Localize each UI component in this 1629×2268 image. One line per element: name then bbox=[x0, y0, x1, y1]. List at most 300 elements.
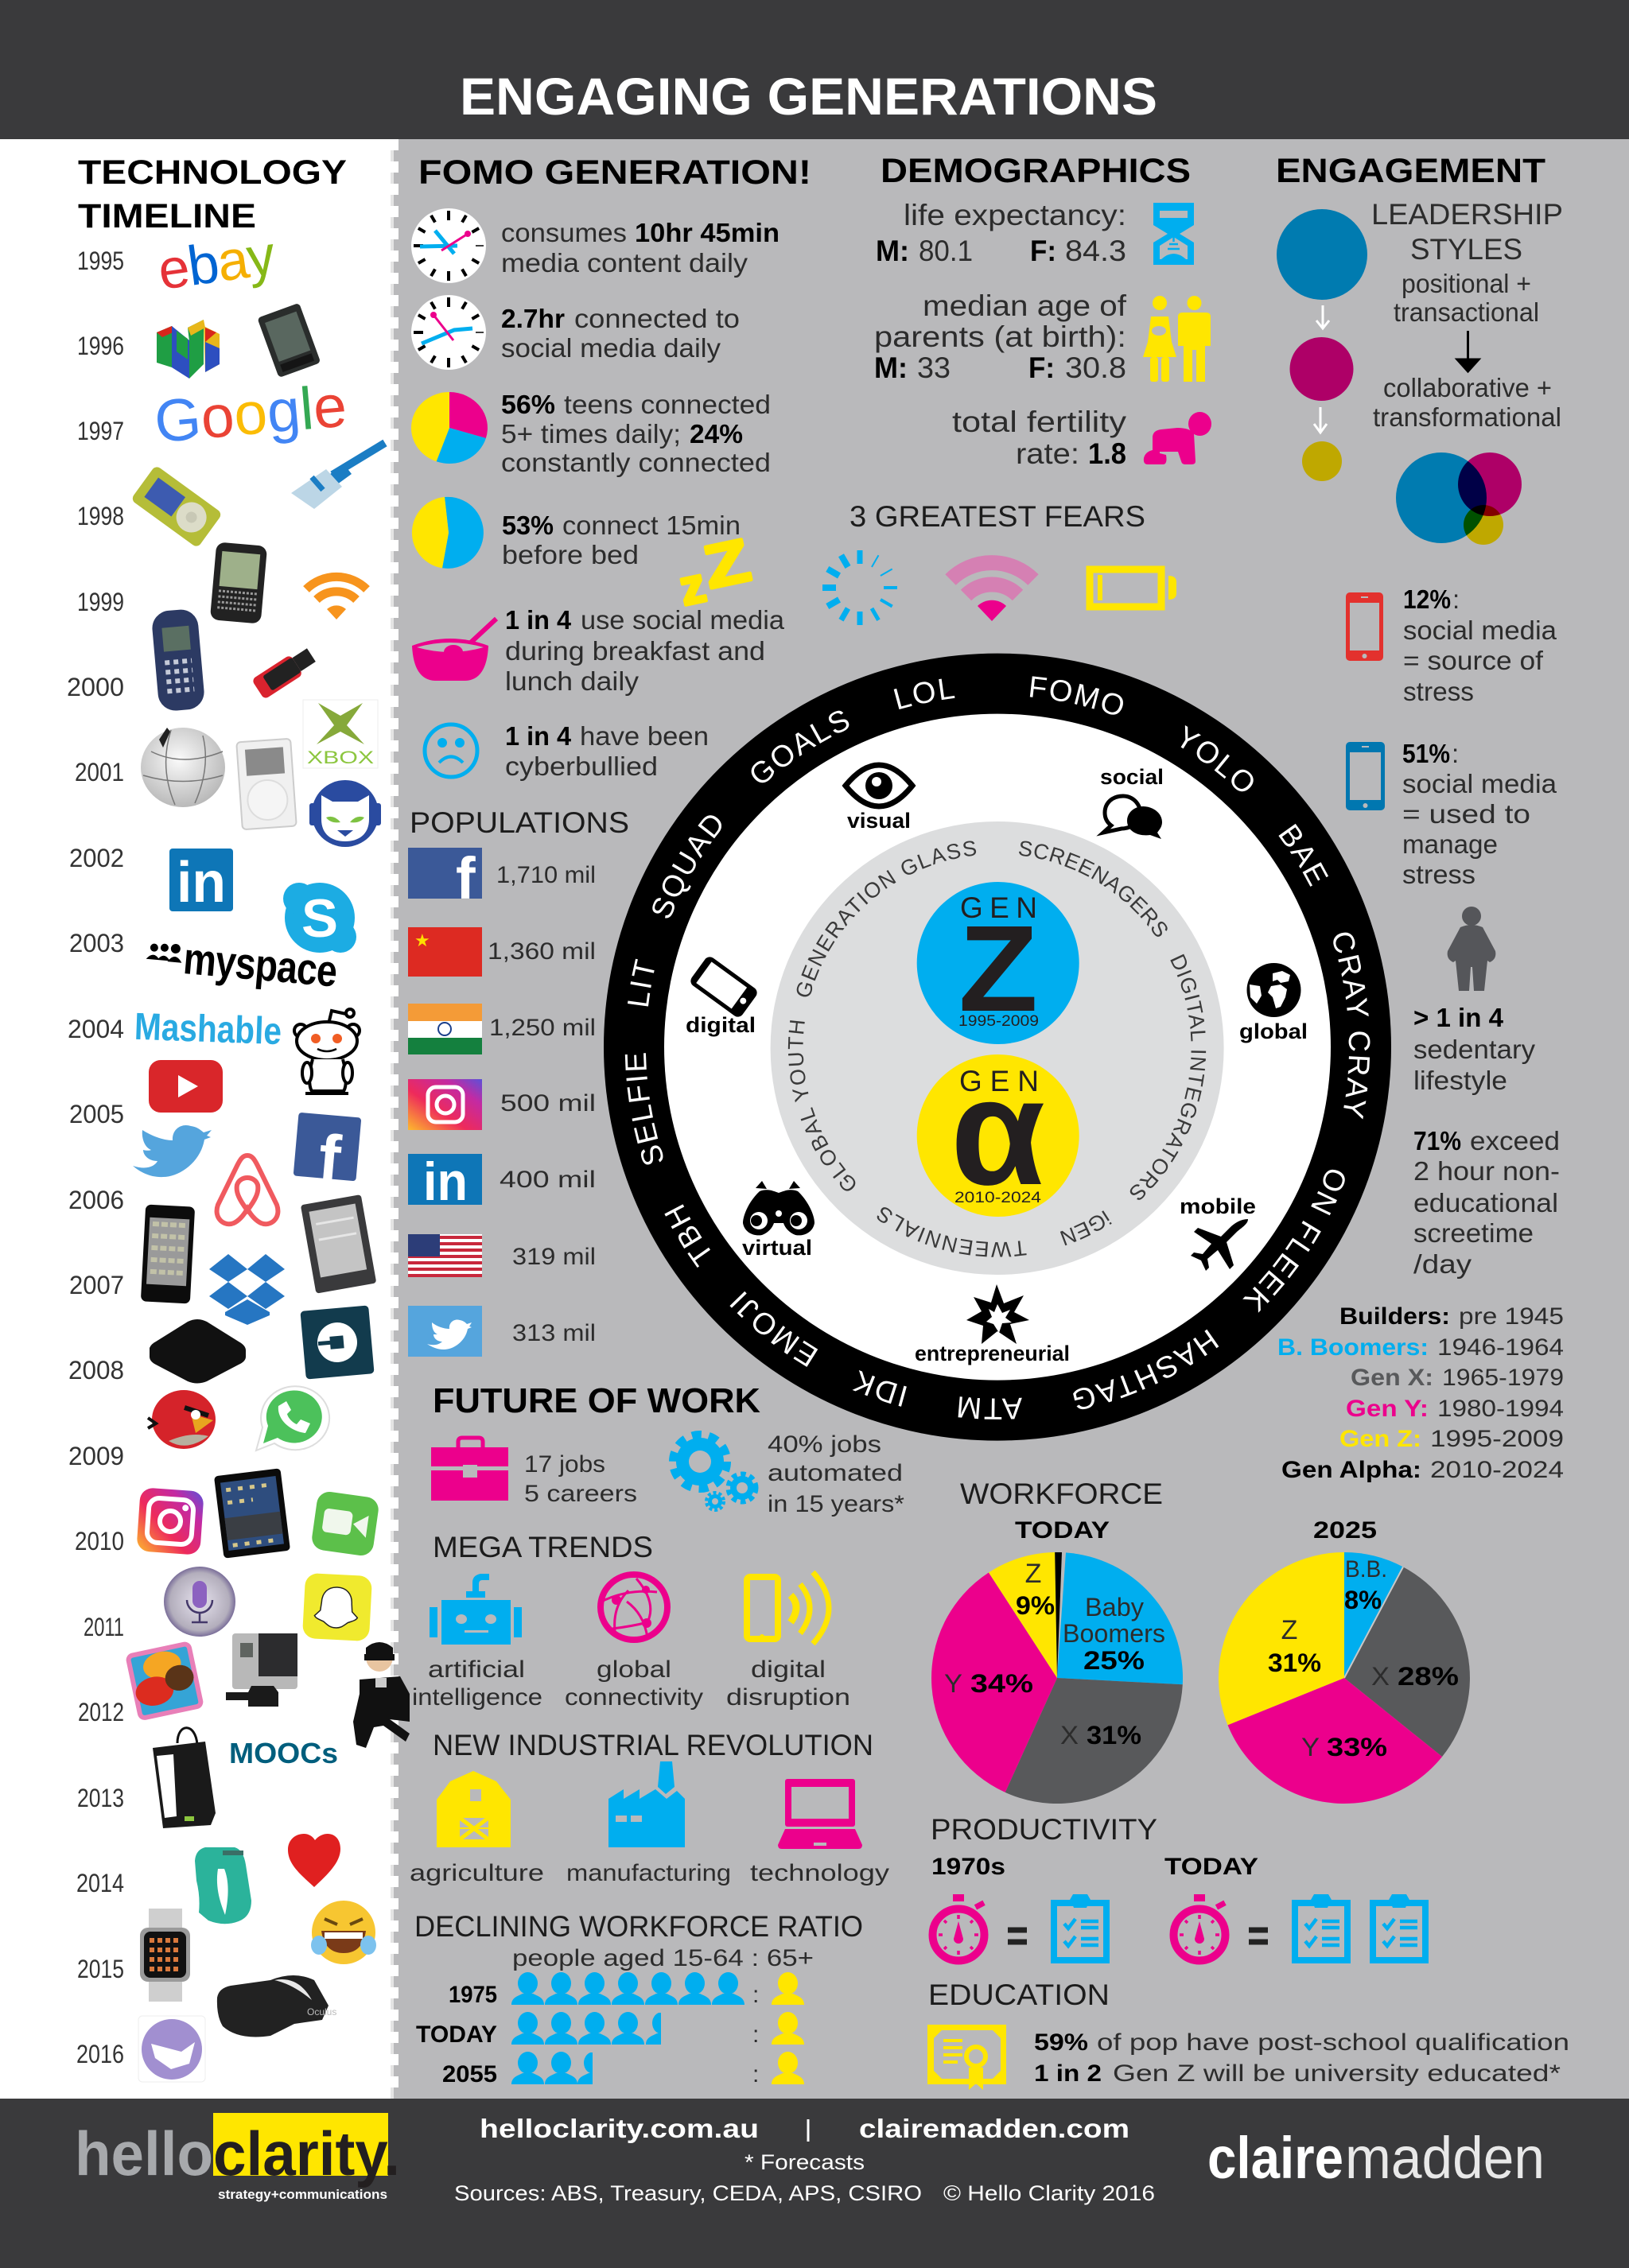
stat: life expectancy: F: bbox=[1030, 235, 1056, 267]
stat: breakfast: 1 in 4 bbox=[505, 605, 572, 635]
badge: gen alpha: 2010-2024 bbox=[954, 1190, 1042, 1206]
stat: life expectancy bbox=[876, 199, 1126, 267]
icon: low battery bbox=[1090, 569, 1176, 607]
stat: median age of parents: parents (at birth): bbox=[874, 320, 1126, 353]
label: manufacturing: manufacturing bbox=[566, 1860, 731, 1886]
chart: workforce today pie: 9% bbox=[1016, 1591, 1055, 1620]
stat: source of stress: 12% bbox=[1403, 584, 1451, 614]
label: global connectivity bbox=[565, 1656, 703, 1711]
text: website links: helloclarity.com.au bbox=[480, 2114, 759, 2143]
stat: before bed: before bed bbox=[502, 540, 639, 569]
icon: wikipedia globe bbox=[141, 728, 225, 807]
heading: new industrial revolution: NEW INDUSTRIAL REVOLUTION bbox=[433, 1729, 873, 1761]
logo: facetime bbox=[310, 1490, 380, 1557]
label: global connectivity: connectivity bbox=[565, 1684, 703, 1711]
year labels: 2008 bbox=[68, 1356, 124, 1384]
stat: education bbox=[1034, 2029, 1569, 2087]
stat: teens connected: 56% bbox=[501, 390, 555, 419]
year labels: 2009 bbox=[68, 1442, 124, 1470]
logo: google: Google bbox=[152, 371, 349, 455]
stat: fertility: total fertility bbox=[952, 406, 1127, 438]
stat: teens connected: teens connected bbox=[564, 390, 771, 419]
label: people aged: people aged 15-64 : 65+ bbox=[512, 1945, 814, 1971]
stat: screentime: exceed bbox=[1470, 1126, 1560, 1155]
logo: hello clarity: strategy+communications bbox=[218, 2187, 387, 2202]
badge: gen z: Z bbox=[958, 900, 1038, 1037]
stat: teens connected: constantly connected bbox=[501, 448, 771, 477]
stat: manage stress: manage bbox=[1402, 829, 1498, 859]
icon: laptop bbox=[778, 1779, 862, 1849]
text: leadership styles: collaborative + bbox=[1383, 373, 1552, 402]
year labels bbox=[67, 247, 124, 2068]
logo: instagram bbox=[136, 1487, 204, 1555]
chart: workforce today pie: X bbox=[1060, 1721, 1079, 1750]
chart: workforce today pie: Baby bbox=[1085, 1593, 1144, 1621]
ring of slang words: LIT bbox=[628, 959, 655, 1007]
heading: technology timeline: TECHNOLOGY bbox=[78, 153, 347, 192]
year labels: 1998 bbox=[77, 502, 124, 530]
label: global connectivity: global bbox=[597, 1656, 671, 1683]
flag: china: ★ bbox=[414, 930, 430, 950]
stat: screentime: screetime bbox=[1413, 1218, 1534, 1248]
stat: jobs automated: 40% jobs bbox=[768, 1431, 881, 1458]
icon: gangnam style figure bbox=[353, 1642, 410, 1748]
stat: manage stress: 51% bbox=[1402, 739, 1450, 768]
year labels: 2010 bbox=[75, 1527, 124, 1555]
inner ring of generation names: GENERATION GLASS bbox=[797, 841, 977, 997]
flag: usa bbox=[408, 1234, 482, 1277]
label: digital: digital bbox=[686, 1013, 756, 1037]
stat: manage stress: = used to bbox=[1402, 799, 1530, 829]
flag: instagram bbox=[408, 1079, 482, 1130]
icon: oculus headset: Oculus bbox=[307, 2006, 336, 2018]
icon: 3d printer bbox=[153, 1728, 216, 1828]
chart: workforce today pie: Y bbox=[944, 1669, 962, 1698]
icon: robot bbox=[430, 1574, 522, 1645]
label: mobile: mobile bbox=[1180, 1194, 1256, 1218]
icon: nintendo 64 bbox=[157, 320, 220, 379]
logo: claire madden: claire bbox=[1207, 2125, 1343, 2191]
label: digital disruption: disruption bbox=[726, 1684, 850, 1711]
icon: weak wifi bbox=[951, 563, 1033, 621]
text: leadership styles: transactional bbox=[1394, 297, 1539, 327]
chart: workforce today pie bbox=[931, 1552, 1183, 1804]
legend: generations: Gen Z: bbox=[1339, 1426, 1421, 1452]
stat: social media daily: connected to bbox=[574, 304, 740, 333]
logo: twitter bird bbox=[133, 1125, 212, 1177]
stat: fertility: rate: bbox=[1016, 437, 1079, 470]
icon: napster bbox=[309, 780, 381, 847]
badge: gen alpha bbox=[917, 1046, 1079, 1217]
flag: linkedin bbox=[408, 1151, 482, 1212]
stat: education: Gen Z will be university educated* bbox=[1113, 2060, 1561, 2087]
text: website links: clairemadden.com bbox=[859, 2114, 1129, 2143]
logo: linkedin: in bbox=[177, 851, 226, 915]
heading: mega trends: MEGA TRENDS bbox=[433, 1531, 653, 1563]
stat: source of stress: : bbox=[1452, 584, 1460, 614]
chart: workforce 2025 pie bbox=[1219, 1552, 1470, 1804]
chart: teens connected pie bbox=[411, 392, 488, 464]
logo: facebook: f bbox=[316, 1121, 344, 1195]
inner ring of generation names: GLOBAL YOUTH bbox=[787, 1020, 856, 1191]
stat: breakfast: use social media bbox=[581, 605, 785, 635]
icon: visual eye bbox=[846, 765, 912, 806]
chart: workforce 2025 pie: B.B. bbox=[1345, 1556, 1387, 1583]
label: virtual: virtual bbox=[742, 1236, 812, 1260]
label: social: social bbox=[1100, 765, 1164, 789]
year labels: 1997 bbox=[77, 417, 124, 445]
label: artificial intelligence: artificial bbox=[428, 1656, 525, 1683]
ring of slang words: CRAY CRAY bbox=[1333, 932, 1370, 1120]
label: agriculture: agriculture bbox=[410, 1860, 544, 1886]
chart: 2055 ratio bbox=[442, 2052, 804, 2087]
icon: certificate bbox=[927, 2025, 1006, 2090]
text: leadership styles: LEADERSHIP bbox=[1371, 198, 1563, 231]
label: india population: 1,250 mil bbox=[489, 1015, 596, 1041]
text: leadership styles: transformational bbox=[1373, 402, 1561, 432]
icon: loading spinner bbox=[822, 550, 897, 625]
inner ring of generation names: TWEENNIALS bbox=[877, 1207, 1027, 1257]
stat: manage stress bbox=[1402, 739, 1557, 889]
chart: 1975 ratio: 1975 bbox=[449, 1982, 497, 2008]
logo: moocs: MOOCs bbox=[229, 1737, 338, 1769]
heading: fomo generation: FOMO GENERATION! bbox=[418, 153, 811, 192]
stat: social media daily: 2.7hr bbox=[501, 304, 565, 333]
header band bbox=[0, 0, 1629, 139]
legend: generations: Gen Alpha: bbox=[1281, 1457, 1421, 1483]
logo: reddit alien bbox=[294, 1009, 360, 1093]
icon: parents bbox=[1143, 296, 1211, 382]
icon: kindle bbox=[301, 1194, 376, 1294]
icon: oculus headset bbox=[217, 1975, 336, 2037]
chart: workforce 2025 pie: Z bbox=[1281, 1615, 1297, 1645]
year labels: 2005 bbox=[69, 1100, 124, 1128]
logo: hello clarity: clarity. bbox=[213, 2118, 400, 2188]
diagram: overlapping circles bbox=[1396, 452, 1522, 545]
panel: technology timeline background bbox=[0, 139, 394, 2099]
icon: sad face bbox=[425, 724, 477, 777]
year labels: 2003 bbox=[69, 929, 124, 957]
stat: median age of parents: M: bbox=[874, 351, 908, 384]
flag: facebook: f bbox=[456, 845, 476, 911]
legend: generations: 1946-1964 bbox=[1437, 1334, 1564, 1361]
year labels: 2001 bbox=[75, 758, 124, 786]
year labels: 2006 bbox=[68, 1186, 124, 1214]
stat: sedentary: lifestyle bbox=[1413, 1066, 1507, 1095]
icon: laughing emoji bbox=[311, 1901, 376, 1964]
inner ring of generation names bbox=[787, 841, 1206, 1257]
arrow: leadership shift bbox=[1457, 331, 1479, 371]
stat: 17 jobs: 5 careers bbox=[524, 1481, 637, 1507]
stat: media content bbox=[501, 218, 780, 278]
stat: manage stress: : bbox=[1452, 739, 1459, 768]
text: website links bbox=[480, 2114, 1129, 2143]
chart: 1975 ratio: : bbox=[752, 1982, 759, 2008]
icon: factory bbox=[608, 1761, 685, 1847]
stat: media content: 10hr 45min bbox=[635, 218, 780, 247]
legend: generations bbox=[1277, 1303, 1564, 1483]
ring of slang words: ON FLEEK bbox=[1242, 1169, 1345, 1313]
logo: snapchat bbox=[302, 1573, 372, 1641]
label: today productivity: TODAY bbox=[1164, 1854, 1258, 1880]
stat: median age of parents: median age of bbox=[923, 289, 1127, 322]
year labels: 2014 bbox=[76, 1869, 124, 1897]
icon: wifi orange bbox=[306, 577, 367, 619]
legend: generations: B. Boomers: bbox=[1277, 1334, 1429, 1361]
label: visual: visual bbox=[847, 809, 911, 833]
icon: binoculars bbox=[743, 1181, 814, 1235]
icon: clock media bbox=[411, 208, 486, 283]
logo: whatsapp bbox=[256, 1386, 329, 1451]
ring of slang words: BAE bbox=[1279, 824, 1328, 887]
icon: ipad bbox=[214, 1468, 290, 1559]
heading: technology timeline bbox=[78, 153, 347, 235]
logo: hello clarity bbox=[75, 2113, 400, 2202]
logo: dropbox bbox=[209, 1254, 285, 1325]
logo: facebook bbox=[292, 1113, 361, 1197]
heading: populations: POPULATIONS bbox=[410, 806, 629, 839]
label: artificial intelligence: intelligence bbox=[412, 1684, 542, 1711]
ring of slang words: IDK bbox=[853, 1370, 907, 1407]
stat: social media daily: social media daily bbox=[501, 333, 721, 363]
chart: 2055 ratio: : bbox=[752, 2061, 759, 2087]
equation: today bbox=[1174, 1894, 1429, 1963]
panel: technology timeline bbox=[67, 153, 385, 2082]
label: facebook population: 1,710 mil bbox=[496, 862, 596, 888]
icon: sleeping zz: z bbox=[675, 557, 710, 616]
logo: ebay: ebay bbox=[154, 223, 279, 301]
badge: gen z: GEN bbox=[960, 891, 1037, 924]
heading: workforce: WORKFORCE bbox=[960, 1478, 1163, 1510]
icon: mp3 player bbox=[130, 465, 223, 548]
wheel: generation z and alpha bbox=[604, 654, 1391, 1441]
label: digital disruption: digital bbox=[751, 1656, 826, 1683]
stat: before bed: 53% bbox=[502, 511, 554, 540]
stat: source of stress: stress bbox=[1403, 677, 1474, 706]
icon: sleeping zz bbox=[671, 526, 758, 616]
icon: red phone bbox=[1346, 592, 1383, 661]
stat: fertility: 1.8 bbox=[1088, 437, 1126, 470]
stat: teens connected: 5+ times daily; bbox=[501, 419, 681, 449]
chart: before bed pie bbox=[412, 497, 484, 569]
stat: breakfast: during breakfast and bbox=[505, 636, 765, 666]
stat: median age of parents: 33 bbox=[917, 351, 951, 384]
icon: sleeping zz: Z bbox=[698, 526, 756, 602]
stat: social media daily bbox=[501, 304, 740, 363]
heading: 3 greatest fears: 3 GREATEST FEARS bbox=[849, 500, 1145, 533]
stat: teens connected bbox=[501, 390, 771, 477]
stat: median age of parents: 30.8 bbox=[1065, 351, 1126, 384]
stat: teens connected: 24% bbox=[690, 419, 743, 449]
icon: gopro bbox=[226, 1633, 297, 1707]
stat: screentime: educational bbox=[1413, 1188, 1558, 1217]
legend: generations: Gen Y: bbox=[1346, 1396, 1429, 1422]
icon: entrepreneurial star bbox=[966, 1284, 1029, 1344]
stat: before bed: connect 15min bbox=[562, 511, 741, 540]
icon: ipod bbox=[236, 739, 297, 829]
chart: workforce today pie: 31% bbox=[1087, 1721, 1141, 1750]
icon: blue phone bbox=[1346, 742, 1385, 810]
chart: workforce 2025 pie: Y bbox=[1301, 1733, 1320, 1761]
stat: education: 1 in 2 bbox=[1034, 2060, 1102, 2087]
label: twitter population: 313 mil bbox=[512, 1320, 596, 1346]
year labels: 1999 bbox=[77, 588, 124, 616]
ring of slang words: TBH bbox=[664, 1204, 710, 1268]
icon: iphone bbox=[141, 1204, 195, 1304]
icon: apple tv bbox=[150, 1319, 246, 1384]
icon: candy crush bbox=[128, 1644, 201, 1718]
flag: china bbox=[408, 927, 482, 977]
year labels: 2013 bbox=[77, 1784, 124, 1812]
stat: cyberbullied bbox=[505, 721, 709, 781]
text: leadership styles: STYLES bbox=[1410, 233, 1522, 266]
heading: productivity: PRODUCTIVITY bbox=[931, 1813, 1157, 1846]
heading: demographics: DEMOGRAPHICS bbox=[881, 152, 1191, 190]
icon: barn bbox=[437, 1771, 511, 1847]
text: sources: © Hello Clarity 2016 bbox=[943, 2181, 1155, 2205]
icon: palm pilot bbox=[257, 303, 321, 378]
icon: clock social bbox=[411, 295, 486, 370]
title: ENGAGING GENERATIONS bbox=[460, 67, 1157, 126]
icon: fitbit band bbox=[195, 1847, 251, 1924]
ring of slang words: ATM bbox=[958, 1396, 1022, 1419]
year labels: 1995 bbox=[77, 247, 124, 275]
logo: youtube bbox=[149, 1060, 223, 1113]
year labels: 1996 bbox=[77, 332, 124, 360]
icon: usb drive bbox=[251, 645, 318, 700]
chart: workforce 2025 pie: 31% bbox=[1268, 1649, 1321, 1677]
legend: generations: 1995-2009 bbox=[1430, 1426, 1564, 1452]
icon: xbox: XBOX bbox=[307, 748, 374, 767]
logo: claire madden: madden bbox=[1345, 2125, 1545, 2191]
legend: generations: Builders: bbox=[1339, 1303, 1450, 1330]
stat: 17 jobs bbox=[524, 1451, 637, 1507]
stat: cyberbullied: 1 in 4 bbox=[505, 721, 572, 751]
icon: hourglass bbox=[1153, 203, 1194, 265]
diagram: shrinking circles bbox=[1277, 209, 1367, 481]
legend: generations: 2010-2024 bbox=[1430, 1457, 1564, 1483]
label: usa population: 319 mil bbox=[512, 1244, 596, 1270]
icon: network globe bbox=[601, 1575, 667, 1640]
stat: screentime: 71% bbox=[1413, 1126, 1461, 1155]
logo: skype: S bbox=[301, 888, 338, 949]
equation: 1970s bbox=[932, 1894, 1110, 1963]
ring of slang words: SELFIE bbox=[625, 1053, 663, 1164]
chart: workforce 2025 pie: X bbox=[1371, 1662, 1390, 1691]
panel: education bbox=[927, 1979, 1569, 2090]
panel: future of work bbox=[410, 1381, 904, 2087]
year labels: 2007 bbox=[69, 1271, 124, 1299]
panel: demographics bbox=[822, 152, 1211, 625]
icon: toolbox bbox=[431, 1438, 508, 1501]
stat: manage stress: stress bbox=[1402, 860, 1475, 889]
label: 2025: 2025 bbox=[1313, 1517, 1377, 1544]
stat: source of stress: = source of bbox=[1403, 646, 1544, 675]
stat: life expectancy: M: bbox=[876, 235, 909, 267]
chart: workforce 2025 pie: 28% bbox=[1398, 1662, 1459, 1691]
flag: twitter bbox=[408, 1306, 482, 1357]
stat: cyberbullied: cyberbullied bbox=[505, 751, 658, 781]
chart: workforce 2025 pie: 8% bbox=[1344, 1586, 1382, 1614]
ring of slang words bbox=[625, 676, 1370, 1419]
chart: today ratio bbox=[416, 2012, 804, 2048]
ring of slang words: HASHTAG bbox=[1073, 1330, 1219, 1409]
chart: 2055 ratio: 2055 bbox=[442, 2061, 497, 2087]
footer band bbox=[0, 2099, 1629, 2268]
stat: 17 jobs: 17 jobs bbox=[524, 1451, 605, 1478]
label: today: TODAY bbox=[1015, 1517, 1110, 1544]
text: leadership styles bbox=[1371, 198, 1563, 432]
icon: cereal bowl bbox=[412, 619, 496, 681]
stat: sedentary: > 1 in 4 bbox=[1413, 1003, 1504, 1032]
year labels: 2002 bbox=[69, 844, 124, 872]
stat: life expectancy: life expectancy: bbox=[904, 199, 1126, 231]
label: 1970s: 1970s bbox=[931, 1854, 1005, 1880]
year labels: 2016 bbox=[76, 2040, 124, 2068]
icon: chat bubbles bbox=[1103, 796, 1162, 839]
chart: today ratio: : bbox=[752, 2021, 759, 2048]
year labels: 2012 bbox=[78, 1698, 124, 1726]
label: digital disruption bbox=[726, 1656, 850, 1711]
icon: gears bbox=[673, 1435, 756, 1510]
year labels: 2015 bbox=[77, 1955, 124, 1983]
panel: productivity bbox=[931, 1813, 1429, 1963]
stat: sedentary bbox=[1413, 1003, 1536, 1095]
chart: workforce today pie: 34% bbox=[970, 1669, 1033, 1698]
label: artificial intelligence bbox=[412, 1656, 542, 1711]
icon: phone waves bbox=[747, 1572, 829, 1644]
logo: myspace bbox=[144, 930, 339, 996]
icon: heart bbox=[288, 1834, 340, 1887]
text: sources: Sources: ABS, Treasury, CEDA, APS, CSIRO bbox=[454, 2181, 922, 2205]
ring of slang words: GOALS bbox=[751, 711, 849, 783]
icon: apple watch bbox=[140, 1909, 190, 2002]
chart: workforce 2025 pie: 33% bbox=[1327, 1733, 1387, 1761]
logo: airbnb bbox=[217, 1155, 278, 1224]
icon: ethernet cable bbox=[291, 443, 385, 509]
flag: facebook bbox=[408, 845, 482, 911]
icon: xbox bbox=[303, 700, 378, 768]
ring of slang words: SQUAD bbox=[652, 815, 721, 918]
stat: median age of parents: F: bbox=[1028, 351, 1055, 384]
stat: jobs automated: in 15 years* bbox=[768, 1491, 904, 1517]
icon: plane bbox=[1191, 1219, 1248, 1271]
icon: clap emoji bbox=[138, 2016, 205, 2082]
icon: crawling baby bbox=[1144, 412, 1211, 464]
stat: media content: consumes bbox=[501, 218, 627, 247]
label: instagram population: 500 mil bbox=[500, 1090, 596, 1117]
stat: source of stress: social media bbox=[1403, 616, 1557, 645]
icon: smartphone bbox=[691, 957, 756, 1016]
chart: workforce today pie: Boomers bbox=[1063, 1619, 1165, 1648]
legend: generations: 1980-1994 bbox=[1437, 1396, 1564, 1422]
panel: populations bbox=[408, 806, 629, 1357]
label: linkedin population: 400 mil bbox=[500, 1167, 596, 1193]
logo: skype bbox=[283, 883, 356, 953]
badge: gen z bbox=[917, 882, 1079, 1044]
stat: median age of parents bbox=[874, 289, 1127, 384]
stat: life expectancy: 80.1 bbox=[919, 235, 973, 267]
stat: breakfast bbox=[505, 605, 785, 696]
text: leadership styles: positional + bbox=[1402, 269, 1531, 298]
stat: media content: media content daily bbox=[501, 248, 748, 278]
year labels: 2000 bbox=[67, 673, 124, 701]
stat: fertility bbox=[952, 406, 1127, 470]
icon: angry bird bbox=[148, 1390, 216, 1449]
stat: screentime: /day bbox=[1413, 1249, 1472, 1279]
stat: jobs automated: automated bbox=[768, 1460, 903, 1486]
stat: life expectancy: 84.3 bbox=[1065, 235, 1126, 267]
